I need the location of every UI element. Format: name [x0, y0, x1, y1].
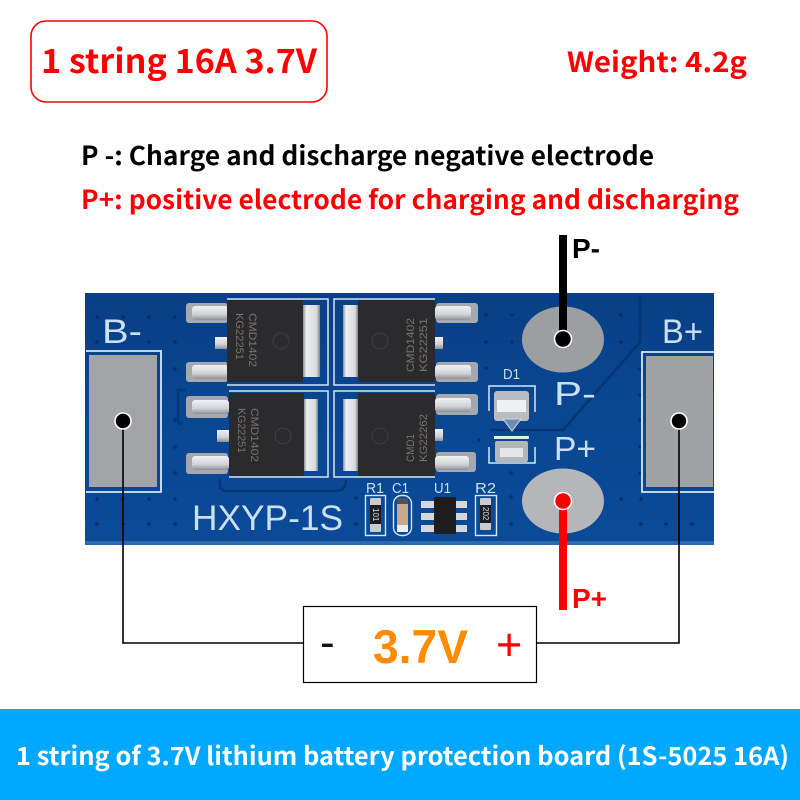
- silkscreen labels: P+: [554, 430, 596, 467]
- silkscreen labels: D1: [503, 366, 520, 383]
- diode D1: [489, 386, 535, 463]
- MOSFET bottom right: [343, 393, 478, 476]
- silkscreen labels: HXYP-1S: [192, 499, 343, 538]
- footer band: [0, 709, 800, 800]
- B- connection dot: [115, 413, 131, 429]
- MOSFET top left: CMD1402: [246, 313, 258, 367]
- B+ terminal: [642, 352, 714, 492]
- P- description: P -: Charge and discharge negative electrode: [81, 136, 654, 173]
- battery supply box: 3.7V: [373, 620, 469, 673]
- board substrate: [85, 293, 714, 545]
- MOSFET outlines: [227, 299, 435, 477]
- resistor R1: [366, 496, 386, 536]
- battery supply box: +: [496, 619, 522, 670]
- MOSFET bottom right: CMD1: [405, 434, 417, 462]
- silkscreen labels: B-: [102, 313, 142, 351]
- B+ connection dot: [671, 413, 687, 429]
- P- pad: [522, 306, 604, 372]
- MOSFET bottom left: [186, 393, 318, 476]
- wire: B- to supply: [123, 421, 303, 643]
- MOSFET top right: CMD1402: [405, 318, 417, 372]
- silkscreen labels: C1: [392, 480, 409, 497]
- silkscreen labels: U1: [434, 480, 451, 497]
- chip U1: [421, 497, 467, 534]
- MOSFET top right: [343, 300, 478, 382]
- P+ lead label: P+: [572, 583, 607, 614]
- MOSFET top left: [186, 300, 320, 382]
- P- output lead: [554, 235, 572, 348]
- weight label: Weight: 4.2g: [567, 41, 747, 81]
- MOSFET top right: KG22251: [418, 318, 430, 372]
- title badge: [31, 21, 327, 102]
- silkscreen labels: R2: [475, 480, 496, 497]
- footer caption: 1 string of 3.7V lithium battery protection board (1S-5025 16A): [16, 737, 789, 773]
- silkscreen labels: P-: [554, 375, 596, 412]
- MOSFET bottom right: KG22262: [418, 414, 430, 462]
- silkscreen labels: B+: [662, 313, 703, 351]
- B- terminal: [86, 351, 161, 492]
- copper traces: [178, 296, 640, 491]
- P+ output lead: [554, 492, 572, 610]
- circuit board: [85, 293, 714, 545]
- MOSFET top left: KG22251: [233, 313, 245, 360]
- P- lead label: P-: [572, 233, 600, 264]
- capacitor C1: [394, 496, 412, 536]
- via dots: [95, 313, 694, 526]
- title badge: 1 string 16A 3.7V: [41, 35, 318, 83]
- resistor R2: [476, 496, 496, 536]
- battery supply box: -: [320, 618, 335, 667]
- resistor R2: 202: [481, 507, 490, 521]
- resistor R1: 101: [371, 508, 380, 522]
- wire: B+ to supply: [537, 421, 679, 643]
- MOSFET bottom left: CMD1402: [248, 408, 260, 462]
- MOSFET bottom left: KG22251: [235, 408, 247, 453]
- silkscreen labels: R1: [366, 480, 384, 497]
- silkscreen labels: [102, 313, 703, 538]
- P+ pad: [522, 468, 604, 534]
- battery supply box: [304, 606, 536, 682]
- P+ description: P+: positive electrode for charging and discharging: [81, 180, 739, 217]
